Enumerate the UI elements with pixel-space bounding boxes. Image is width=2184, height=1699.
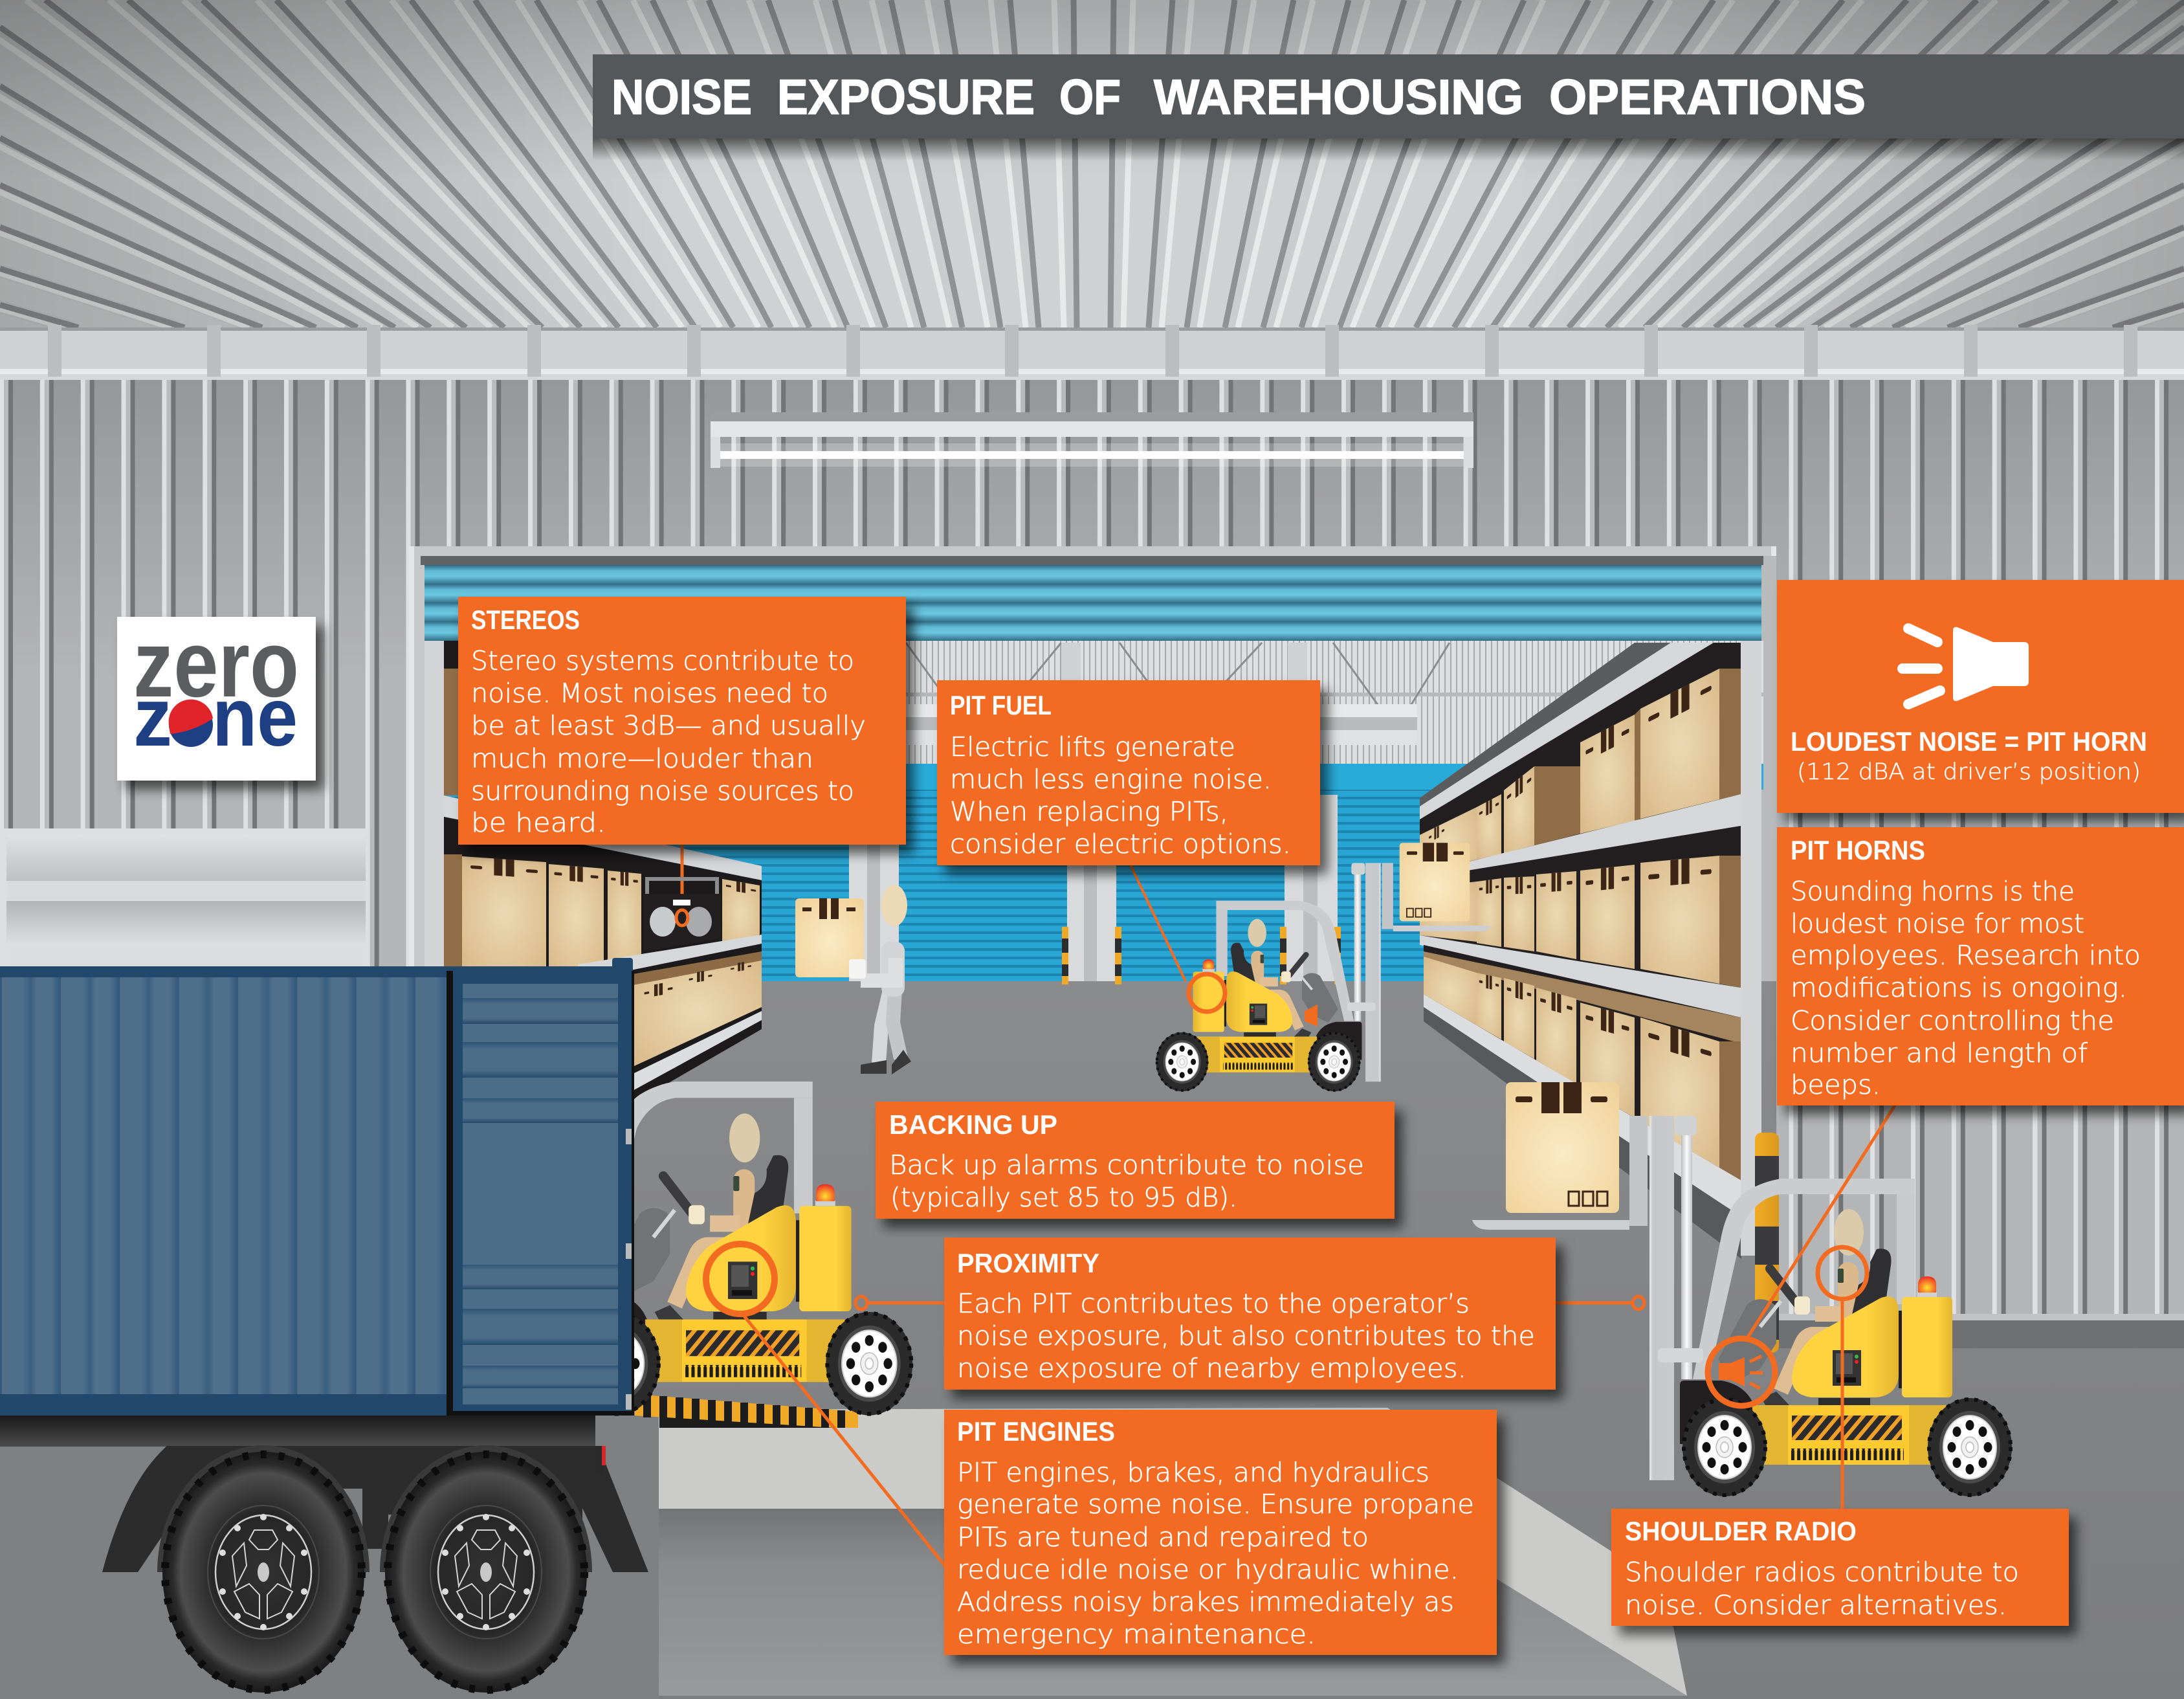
callout: stereos: be heard. — [471, 807, 606, 838]
callout: pit horns: number and length of — [1791, 1038, 2088, 1069]
callout: pit fuel: PIT FUEL — [950, 690, 1052, 720]
right bollard — [1755, 1133, 1779, 1353]
callout: pit fuel: consider electric options. — [950, 828, 1291, 860]
leader line and marker: proximity — [855, 1296, 1644, 1309]
title bar: OPERATIONS — [1549, 70, 1866, 125]
dock ramp — [635, 1394, 858, 1428]
callout: stereos: noise. Most noises need to — [471, 678, 828, 709]
logo: zero zone — [117, 611, 316, 781]
callout: pit fuel: When replacing PITs, — [950, 796, 1228, 827]
callout: shoulder radio: SHOULDER RADIO — [1625, 1516, 1857, 1546]
callout: pit horns — [1777, 827, 2184, 1105]
callout: shoulder radio — [1611, 1509, 2069, 1626]
left shelving with boxes — [425, 641, 762, 1104]
callout: pit engines: generate some noise. Ensure propane — [957, 1489, 1474, 1520]
callout: backing up: BACKING UP — [889, 1109, 1057, 1140]
ceiling light fixture — [711, 412, 1473, 468]
callout: pit engines: PIT engines, brakes, and hydraulics — [957, 1457, 1429, 1488]
title bar: WAREHOUSING — [1154, 70, 1523, 125]
logo: zero zone: ne — [212, 671, 298, 764]
leader line and marker: shoulder radio — [1818, 1247, 1867, 1511]
right shelving with boxes — [1420, 641, 1761, 1259]
callout: pit fuel — [937, 680, 1320, 865]
callout: pit horns: Sounding horns is the — [1791, 876, 2075, 907]
callout: stereos: be at least 3dB— and usually — [471, 710, 866, 741]
roller doors and floor — [0, 790, 1776, 1699]
worker carrying box — [795, 885, 911, 1074]
bollards beside roller doors — [1062, 927, 1341, 984]
callout: pit engines: Address noisy brakes immediately as — [957, 1586, 1454, 1617]
callout: shoulder radio: Shoulder radios contribute to — [1625, 1557, 2019, 1588]
callout: backing up: (typically set 85 to 95 dB). — [890, 1182, 1237, 1213]
callout: pit horns: modifications is ongoing. — [1791, 972, 2127, 1003]
ceiling with radiating ribs — [0, 0, 2184, 328]
callout: pit horns: beeps. — [1791, 1069, 1881, 1100]
callout: pit horns: PIT HORNS — [1791, 835, 1925, 865]
panel: loudest noise: LOUDEST NOISE = PIT HORN — [1791, 726, 2147, 757]
lower wall trim and right floor — [1776, 1314, 2184, 1699]
callout: pit engines: reduce idle noise or hydraulic whine. — [957, 1554, 1459, 1585]
callout: proximity: noise exposure, but also contributes to the — [957, 1320, 1535, 1351]
callout: backing up — [876, 1102, 1395, 1219]
warehouse interior back wall — [443, 641, 1763, 790]
left wall vent panel — [0, 828, 369, 968]
panel: loudest noise: (112 dBA at driver’s position) — [1797, 759, 2141, 785]
callout: stereos — [458, 597, 906, 845]
leader line and marker: pit fuel — [1129, 861, 1318, 1027]
icon: horn speaker — [1903, 627, 2029, 704]
corrugated back wall — [0, 380, 2184, 1318]
callout: proximity: noise exposure of nearby employees. — [957, 1353, 1466, 1384]
callout: proximity — [944, 1238, 1556, 1390]
callout: pit engines: PIT ENGINES — [957, 1416, 1115, 1447]
callout: pit engines — [944, 1410, 1497, 1655]
callout: pit horns: employees. Research into — [1791, 940, 2141, 971]
callout: pit engines: emergency maintenance. — [957, 1619, 1316, 1650]
callout: pit engines: PITs are tuned and repaired to — [957, 1522, 1369, 1553]
title bar — [593, 54, 2184, 161]
left forklift — [357, 981, 912, 1416]
logo: zero zone: zero — [133, 611, 299, 716]
callout: proximity: PROXIMITY — [957, 1248, 1099, 1278]
title bar: EXPOSURE — [777, 70, 1035, 125]
title bar: OF — [1059, 70, 1121, 125]
ceiling beam with brackets — [0, 325, 2184, 380]
leader line and marker: pit horn speaker icon — [1708, 1104, 1896, 1406]
callout: proximity: Each PIT contributes to the operator’s — [957, 1288, 1470, 1319]
shutter rolled up at door top — [425, 565, 1761, 641]
callout: backing up: Back up alarms contribute to noise — [889, 1149, 1364, 1181]
lower loading dock floor — [0, 1408, 1687, 1699]
stereo boom box — [643, 879, 721, 951]
logo: zero zone: z — [133, 671, 172, 764]
panel: loudest noise — [1777, 580, 2184, 813]
callout: pit fuel: Electric lifts generate — [950, 731, 1235, 762]
callout: stereos: much more—louder than — [471, 743, 813, 774]
callout: stereos: STEREOS — [471, 605, 580, 635]
callout: stereos: Stereo systems contribute to — [471, 645, 854, 676]
leader line: stereos — [681, 841, 683, 911]
truck wheels — [162, 1452, 587, 1693]
leader line and marker: pit engines — [706, 1244, 948, 1570]
warehouse door frame — [409, 546, 1776, 1258]
callout: stereos: surrounding noise sources to — [471, 775, 854, 806]
truck chassis and fenders — [0, 1416, 648, 1572]
right forklift — [1472, 1082, 2012, 1496]
title bar: NOISE — [612, 70, 752, 125]
callout: pit horns: Consider controlling the — [1791, 1005, 2114, 1036]
shipping container — [0, 958, 634, 1416]
callout: shoulder radio: noise. Consider alternatives. — [1625, 1590, 2007, 1621]
callout: pit fuel: much less engine noise. — [950, 764, 1272, 795]
callout: pit horns: loudest noise for most — [1791, 908, 2084, 939]
far forklift — [1156, 843, 1491, 1091]
